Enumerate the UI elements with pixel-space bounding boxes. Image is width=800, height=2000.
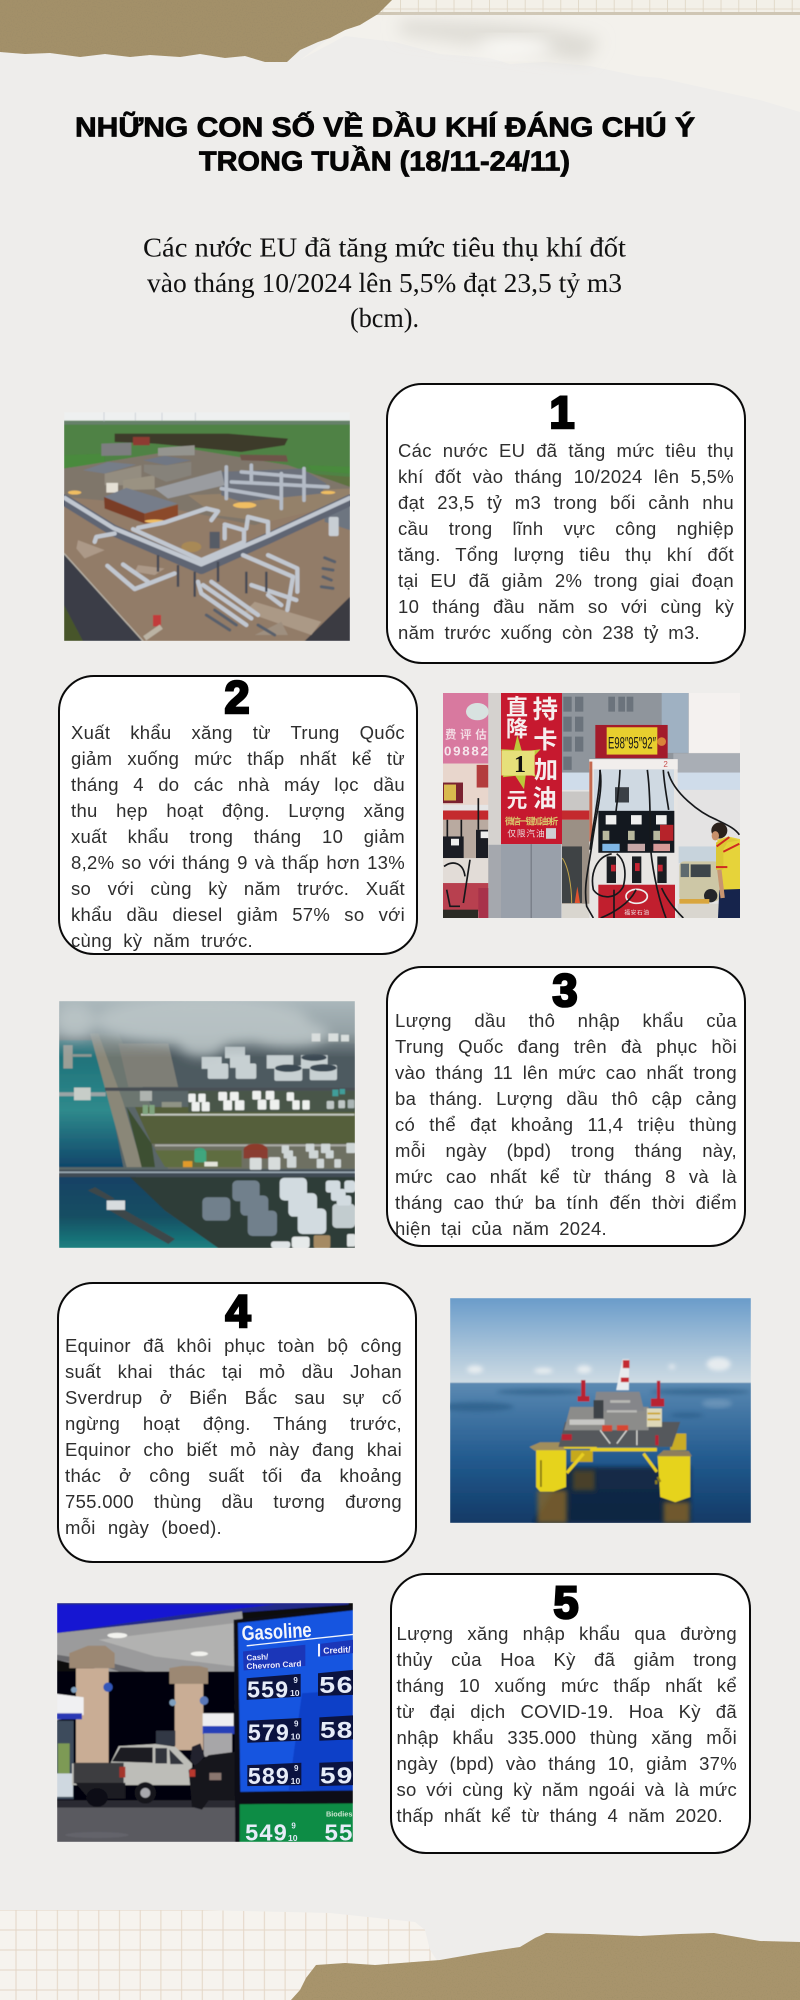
card 4 xyxy=(57,1282,417,1563)
text block 3: mỗi ngày (bpd) trong tháng này, xyxy=(395,1140,737,1160)
photo: gasoline price sign: 9 xyxy=(293,1676,298,1685)
text block 4: 755.000 thùng dầu tương đương xyxy=(65,1490,402,1512)
text block 5: ngày (bpd) vào tháng 10, giảm 37% xyxy=(396,1753,737,1774)
text block 2 xyxy=(71,722,405,951)
pump sign: E98″95″92″ xyxy=(608,734,656,753)
photo: gasoline price sign: 10 xyxy=(291,1776,300,1786)
photo: gasoline price sign: Gasoline xyxy=(241,1619,312,1645)
text block 2: xuất khẩu trong tháng 10 giảm xyxy=(71,826,405,847)
photo: gas station: 仅限汽油 xyxy=(507,827,545,839)
photo: gasoline price sign: Biodies xyxy=(326,1809,352,1818)
text block 5: Lượng xăng nhập khẩu qua đường xyxy=(396,1623,737,1644)
photo: gas station: 2 xyxy=(663,760,668,769)
text block 5 xyxy=(396,1623,737,1826)
photo: gasoline price sign: 9 xyxy=(294,1764,299,1773)
photo: gasoline price sign: 589 xyxy=(247,1765,289,1792)
number 1: 1 xyxy=(549,387,575,438)
photo: gasoline price sign: 56 xyxy=(319,1674,353,1701)
photo: gas station: 油 xyxy=(533,779,557,813)
text block 3: Trung Quốc đang trên đà phục hồi xyxy=(395,1036,737,1056)
text block 4 xyxy=(65,1334,402,1538)
photo: gas plant xyxy=(64,412,350,641)
text block 5: thủy của Hoa Kỳ đã giảm trong xyxy=(396,1649,737,1670)
photo: gas station: 加 xyxy=(534,750,558,785)
text block 4: Equinor cho biết mỏ này đang khai xyxy=(65,1438,402,1460)
card 3 xyxy=(386,966,746,1247)
text block 5: từ đại dịch COVID-19. Hoa Kỳ đã xyxy=(396,1701,737,1722)
photo: gasoline price sign: 9 xyxy=(291,1822,296,1831)
photo: gas station: 1 xyxy=(514,752,526,778)
top left kraft paper xyxy=(0,0,392,62)
subtitle xyxy=(143,232,626,333)
text block 1: tăng. Tổng lượng tiêu thụ khí đốt xyxy=(398,544,734,565)
text block 5: thấp nhất kể từ tháng 4 năm 2020. xyxy=(396,1805,723,1826)
text block 2: tháng 4 do các nhà máy lọc dầu xyxy=(71,774,405,795)
text block 2: khẩu dầu diesel giảm 57% so với xyxy=(71,904,405,925)
fog xyxy=(59,1001,355,1058)
text block 2: so với cùng kỳ năm trước. Xuất xyxy=(71,878,405,899)
title: NHỮNG CON SỐ VỀ DẦU KHÍ ĐÁNG CHÚ Ý xyxy=(75,110,695,142)
text block 4: mỗi ngày (boed). xyxy=(65,1516,222,1538)
photo: gas station: 卡 xyxy=(533,720,557,755)
text block 3: Lượng dầu thô nhập khẩu của xyxy=(395,1010,737,1030)
photo: refinery and port xyxy=(59,1001,355,1248)
sign xyxy=(234,1606,353,1842)
text block 5: tháng 10 xuống mức thấp nhất kể xyxy=(396,1675,737,1696)
text block 4: ngừng hoạt động. Tháng trước, xyxy=(65,1412,402,1434)
text block 1: cầu trong lĩnh vực công nghiệp xyxy=(398,518,734,539)
photo: gas station: 降 xyxy=(506,713,528,744)
photo: gasoline price sign: 579 xyxy=(247,1722,289,1749)
text block 1: tại EU đã giảm 2% trong giai đoạn xyxy=(398,570,734,591)
photo: gasoline price sign: 9 xyxy=(294,1720,299,1729)
photo: gasoline price sign xyxy=(57,1603,353,1842)
text block 3: hiện tại của năm 2024. xyxy=(395,1218,607,1238)
attendant xyxy=(711,822,740,918)
text block 1: đạt 23,5 tỷ m3 trong bối cảnh nhu xyxy=(398,492,734,513)
title xyxy=(75,110,696,177)
mid tanks xyxy=(244,1144,268,1156)
bottom right kraft paper xyxy=(291,1933,800,2000)
photo: gasoline price sign: Credit/ xyxy=(323,1644,351,1656)
photo: gas station: 微信一键加油9折 xyxy=(505,814,558,827)
subtitle: (bcm). xyxy=(350,302,419,333)
number 5: 5 xyxy=(553,1577,579,1628)
text block 3: mức cao nhất kể từ tháng 8 và là xyxy=(395,1166,737,1186)
price rows xyxy=(247,1670,353,1786)
text block 4: Sverdrup ở Biển Bắc sau sự cố xyxy=(65,1386,402,1408)
text block 4: thác ở công suất tối đa khoảng xyxy=(65,1464,402,1486)
photo: gasoline price sign: 10 xyxy=(291,1731,300,1741)
title: TRONG TUẦN (18/11-24/11) xyxy=(199,146,570,176)
text block 1: 10 tháng đầu năm so với cùng kỳ xyxy=(398,596,734,617)
number 3: 3 xyxy=(552,965,578,1016)
card 5 xyxy=(390,1573,751,1854)
pickup truck xyxy=(72,1744,192,1807)
photo: gasoline price sign: 58 xyxy=(319,1719,353,1746)
photo: gasoline price sign: 59 xyxy=(319,1764,353,1792)
storage tanks xyxy=(188,1091,354,1111)
text block 3: vào tháng 11 lên mức cao nhất trong xyxy=(395,1062,737,1082)
lower tanks xyxy=(202,1180,277,1236)
text block 3 xyxy=(395,1010,737,1238)
text block 3: tháng cao thứ ba tính đến thời điểm xyxy=(395,1192,737,1212)
text block 5: so với cùng kỳ năm ngoái và là mức xyxy=(396,1779,737,1800)
text block 3: ba tháng. Lượng dầu thô cập cảng xyxy=(395,1088,737,1108)
bottom left grid paper xyxy=(0,1910,440,2000)
photo: gas station: 费评估 xyxy=(445,727,487,741)
text block 1: khí đốt vào tháng 10/2024 lên 5,5% xyxy=(398,466,734,487)
photo: gas station xyxy=(443,693,740,918)
photo: gas station: 元 xyxy=(507,783,527,813)
text block 1: năm trước xuống còn 238 tỷ m3. xyxy=(398,622,700,643)
text block 2: thu hẹp hoạt động. Lượng xăng xyxy=(71,800,405,821)
photo: gas station: 福安石油 xyxy=(624,908,649,917)
text block 4: suất khai thác tại mỏ dầu Johan xyxy=(65,1360,402,1382)
text block 1: Các nước EU đã tăng mức tiêu thụ xyxy=(398,440,734,461)
photo: gasoline price sign: 10 xyxy=(290,1688,300,1698)
card 2 xyxy=(58,675,418,955)
card 1 xyxy=(386,383,746,664)
number 4: 4 xyxy=(225,1286,251,1337)
text block 2: giảm xuống mức thấp nhất kể từ xyxy=(71,748,405,769)
subtitle: Các nước EU đã tăng mức tiêu thụ khí đốt xyxy=(143,232,626,262)
text block 5: nhập khẩu 335.000 thùng xăng mỗi xyxy=(396,1727,737,1748)
photo: gasoline price sign: Chevron Card xyxy=(246,1659,302,1671)
photo: gasoline price sign: 559 xyxy=(247,1678,289,1705)
subtitle: vào tháng 10/2024 lên 5,5% đạt 23,5 tỷ m3 xyxy=(147,267,622,298)
pillars xyxy=(76,1668,203,1763)
photo: gas station: 09882 xyxy=(444,744,488,759)
ship xyxy=(88,1187,175,1244)
text block 2: cùng kỳ năm trước. xyxy=(71,930,253,951)
text block 2: Xuất khẩu xăng từ Trung Quốc xyxy=(71,722,405,743)
photo: gasoline price sign: Cash/ xyxy=(246,1652,269,1662)
pump sign xyxy=(595,725,668,758)
number 2: 2 xyxy=(224,672,250,723)
text block 1 xyxy=(398,440,734,643)
text block 4: Equinor đã khôi phục toàn bộ công xyxy=(65,1334,402,1356)
text block 3: có thể đạt khoảng 11,4 triệu thùng xyxy=(395,1114,737,1134)
text block 2: 8,2% so với tháng 9 và thấp hơn 13% xyxy=(71,852,405,873)
photo: offshore oil platform xyxy=(450,1298,751,1523)
top right white paper xyxy=(300,0,800,112)
pumps xyxy=(57,1694,84,1720)
